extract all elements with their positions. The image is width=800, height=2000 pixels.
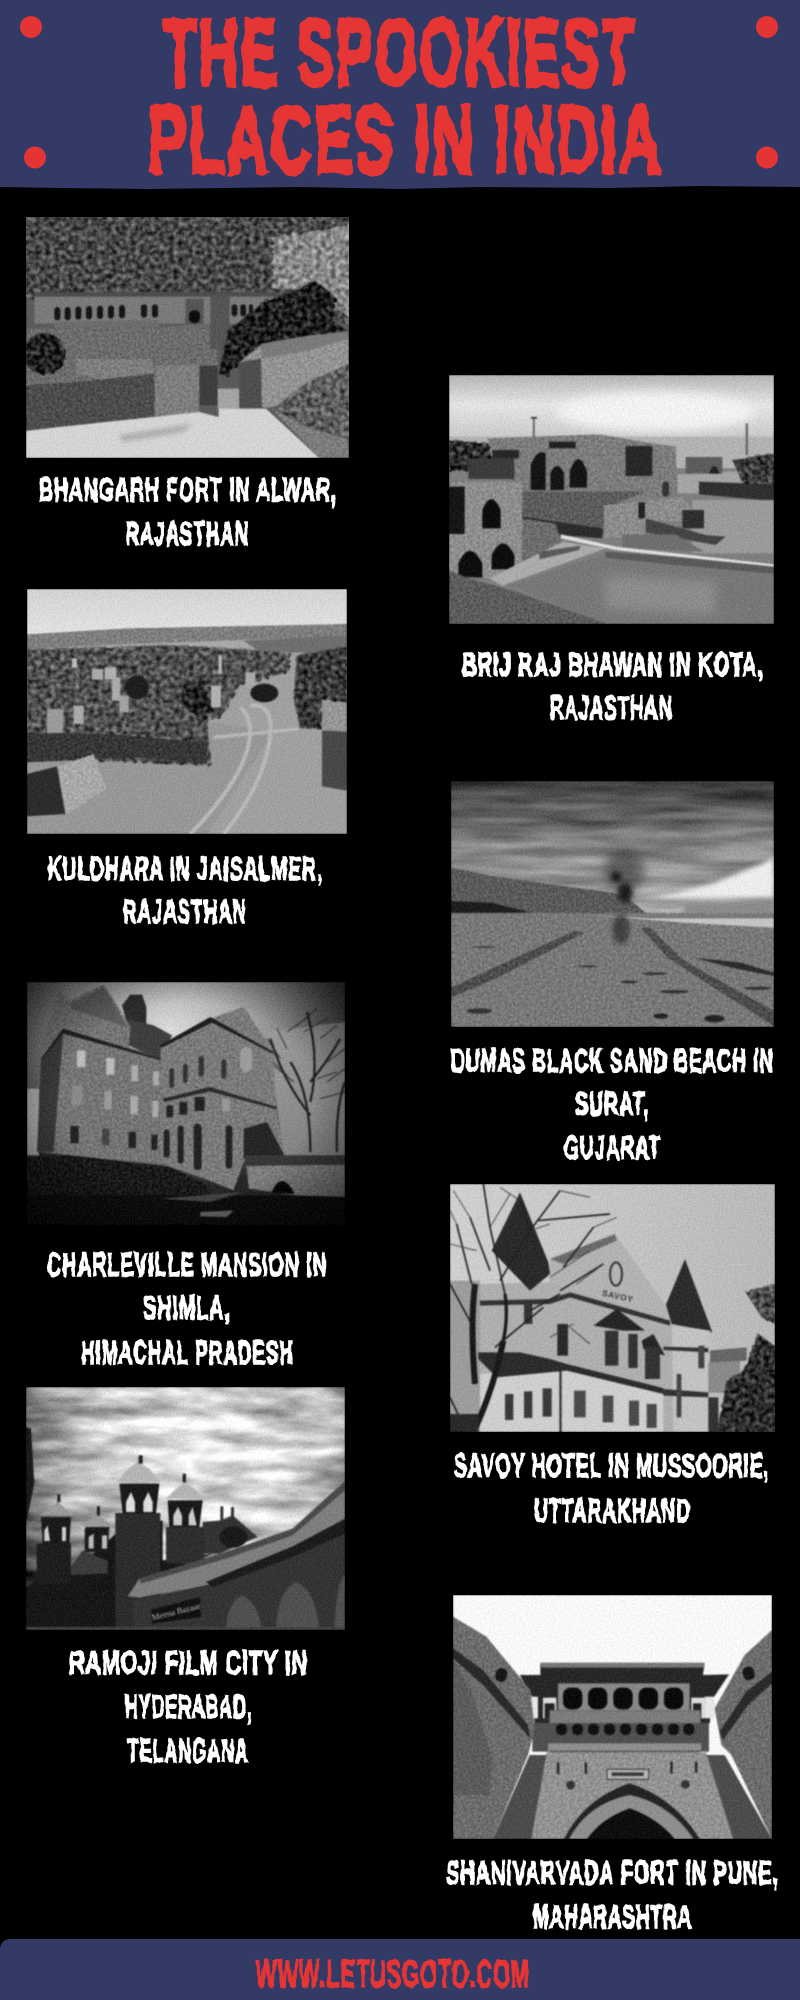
caption: Dumas Beach (451, 1042, 774, 1166)
photo: Charleville Mansion (27, 982, 345, 1225)
panel: Brij Raj Bhawan (449, 375, 774, 726)
photo: Savoy Hotel (450, 1184, 775, 1432)
caption: Ramoji Film City (69, 1644, 308, 1769)
photo: Savoy Hotel: SAVOY (601, 1288, 635, 1304)
caption: Charleville Mansion: SHIMLA, (143, 1289, 231, 1326)
dot: bottom left (24, 146, 46, 168)
footer background (0, 1939, 800, 2000)
caption: Ramoji Film City: TELANGANA (128, 1732, 249, 1769)
photo: Bhangarh Fort (26, 217, 349, 458)
photo: Ramoji Film City: Meena Bazaar (151, 1601, 202, 1622)
caption: Bhangarh Fort: BHANGARH FORT IN ALWAR, (39, 471, 337, 508)
dot: top left (20, 16, 42, 38)
dot: top right (756, 16, 778, 38)
caption: Ramoji Film City: HYDERABAD, (125, 1688, 252, 1725)
dot: bottom right (756, 146, 778, 168)
caption: Bhangarh Fort (39, 471, 337, 552)
panel: Shanivarvada Fort (446, 1595, 779, 1935)
photo: Dumas Beach (451, 781, 774, 1027)
caption: Shanivarvada Fort (446, 1854, 779, 1935)
caption: Kuldhara: KULDHARA IN JAISALMER, (48, 850, 323, 887)
caption: Kuldhara (48, 850, 323, 930)
caption: Charleville Mansion (47, 1246, 328, 1371)
panel: Bhangarh Fort (16, 207, 359, 552)
footer banner (0, 1939, 800, 2000)
panel: Savoy Hotel (450, 1184, 777, 1529)
caption: Savoy Hotel (454, 1447, 770, 1529)
caption: Brij Raj Bhawan: RAJASTHAN (550, 689, 673, 726)
header banner (0, 0, 800, 193)
photo: Brij Raj Bhawan (449, 375, 774, 624)
panel: Kuldhara (27, 589, 349, 930)
caption: Brij Raj Bhawan (462, 646, 764, 726)
panel: Dumas Beach (451, 781, 774, 1166)
banner background (0, 0, 800, 189)
photo: Kuldhara (27, 589, 347, 834)
photo: Ramoji Film City (26, 1387, 345, 1630)
photo: Shanivarvada Fort (453, 1595, 772, 1839)
panel: Ramoji Film City (26, 1387, 345, 1769)
footer url: WWW.LETUSGOTO.COM (256, 1953, 530, 1996)
caption: Bhangarh Fort: RAJASTHAN (126, 515, 249, 552)
caption: Dumas Beach: SURAT, (575, 1085, 650, 1122)
caption: Dumas Beach: GUJARAT (564, 1129, 661, 1166)
title (148, 0, 663, 193)
panel: Charleville Mansion (27, 982, 345, 1371)
caption: Ramoji Film City: RAMOJI FILM CITY IN (69, 1644, 308, 1681)
caption: Savoy Hotel: UTTARAKHAND (534, 1492, 691, 1529)
caption: Kuldhara: RAJASTHAN (123, 893, 247, 930)
caption: Charleville Mansion: HIMACHAL PRADESH (81, 1334, 294, 1371)
caption: Charleville Mansion: CHARLEVILLE MANSION IN (47, 1246, 328, 1283)
